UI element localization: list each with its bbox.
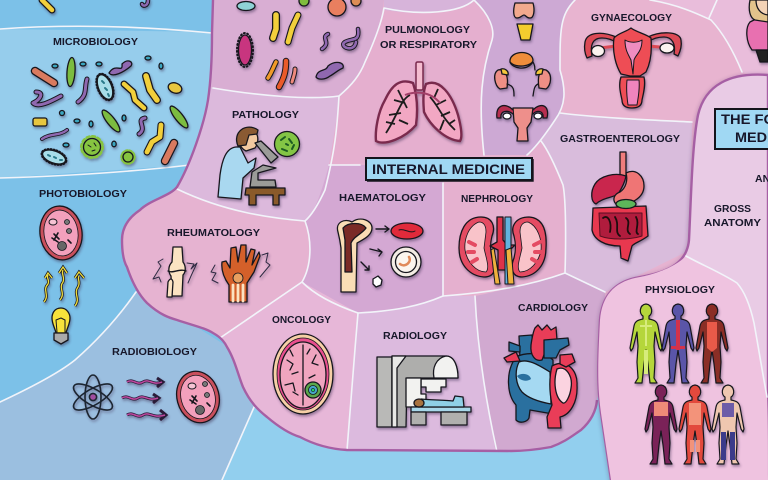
body: muscular [679,385,711,464]
microbe: purple s-curve [139,118,145,134]
region: radiology [345,296,497,460]
microbe: green rod [66,57,76,87]
label: pulmonology or respiratory: OR RESPIRATORY [380,39,477,51]
label: radiobiology: RADIOBIOLOGY [112,346,197,358]
icon: radiation arrows [122,378,166,420]
thymus yellow [517,24,533,40]
pulmonary artery [544,338,569,358]
icon: lungs [376,62,461,143]
hair [237,127,258,146]
icon: arthritic hand [211,245,270,302]
red cell [391,223,423,239]
pancreas [510,52,533,66]
label: gross anatomy [704,203,761,229]
region: cardiology [475,273,605,460]
uterus body [613,28,651,76]
region: pathology [177,86,339,221]
icon: radiotherapy machine [377,356,471,427]
icon: pathologist at microscope [218,127,300,205]
icon: heart [504,325,577,428]
icon group: microbes, upper region [237,0,361,87]
microbe: red-orange [279,61,286,87]
gall bladder and pancreas [616,200,636,208]
heading: the foundations of medicine: MEDI [735,130,768,145]
microbe: teal bacterium [93,71,117,103]
platelet [373,276,382,287]
microbe: yellow rectangle [33,118,47,126]
body: lymphatic [630,304,662,383]
label: cardiology: CARDIOLOGY [518,302,588,314]
microbe: green virus [82,136,102,158]
table [245,188,285,205]
stomach [614,171,644,204]
icon: yellow light arrows [44,267,84,306]
icon: kidneys [459,217,546,284]
patient [418,396,464,407]
microbe: pink rod [292,69,295,82]
left heart [547,363,577,428]
microbe: small virus [122,150,134,164]
label: rheumatology: RHEUMATOLOGY [167,227,260,239]
region: haematology [302,165,443,313]
microbe: green rod [168,104,190,130]
kidney right [512,217,546,277]
microbe: orange pair [268,62,276,78]
heading: internal medicine [366,158,533,181]
base block [406,378,426,407]
superior vena cava [519,335,534,360]
coat [218,147,256,199]
region: physiology [598,256,768,480]
icon: person, top right [747,0,768,62]
region: top microbes [205,0,384,98]
label: physiology: PHYSIOLOGY [645,284,715,296]
label: gross anatomy: GROSS [714,203,751,215]
right chambers [516,361,551,404]
column [377,357,392,427]
icon: haematology bone and blood cells [337,219,423,292]
bone [337,219,372,292]
body: respiratory [645,385,677,464]
icon: female reproductive system [585,28,681,108]
icon: light bulb [52,308,70,344]
white cell [391,247,421,277]
microbe: magenta bacterium [237,33,253,67]
region: gastroenterology [541,113,692,292]
microbe: purple coil [109,61,132,75]
body: digestive [696,304,728,383]
microbe: yellow chain lower [147,125,161,152]
label: pathology: PATHOLOGY [232,109,299,121]
panel: foundations of medicine [598,75,768,480]
gantry [392,356,458,427]
microscope [250,141,278,187]
region: top small [384,0,474,13]
body: skeletal [712,385,744,464]
icon: knee joint [153,247,197,297]
label: pulmonology or respiratory: PULMONOLOGY [385,24,470,36]
label: microbiology: MICROBIOLOGY [53,36,138,48]
lung: left [376,81,417,143]
microbe: yellow chain [124,84,144,108]
microbe: yellow chains right [288,15,298,42]
region: oncology [306,284,352,310]
microbe: purple thread [42,130,67,139]
label: radiology: RADIOLOGY [383,330,447,342]
icon: photobiology cell [36,203,86,263]
head [421,379,446,392]
region: pulmonology [330,122,336,164]
kidney left [495,70,508,89]
intestines [592,206,648,261]
body details [640,320,735,460]
microbe: green rod [100,108,122,134]
label: gynaecology: GYNAECOLOGY [591,12,672,24]
microbe: purple worm [33,92,61,105]
label: haematology: HAEMATOLOGY [339,192,426,204]
oesophagus [620,152,626,176]
table [411,407,471,412]
region: nephrology [443,141,566,296]
icon: brain with tumour [273,334,333,414]
microbe: yellow oval [167,81,183,95]
vagina [620,77,645,108]
microbe: teal bacterium lower [39,146,69,168]
heading: internal medicine: INTERNAL MEDICINE [372,162,525,177]
label: nephrology: NEPHROLOGY [461,193,533,205]
aorta [531,325,557,360]
microbe: purple curved rod [78,79,87,102]
lung: right [423,83,461,141]
body: circulatory [662,304,694,383]
microbe: yellow chain two [146,76,157,100]
kidney left [459,217,495,277]
label: gastroenterology: GASTROENTEROLOGY [560,133,680,145]
label: pulmonology or respiratory [380,24,477,51]
arrows [361,226,389,270]
icon: digestive system [592,152,648,261]
microbe: brown rod [35,71,54,83]
lung: trachea [416,62,423,90]
sample dish [274,132,300,156]
label: gross anatomy: ANATOMY [704,217,761,229]
heading: the foundations of medicine [715,109,768,149]
icon group: microbes, microbiology [33,0,190,168]
uterine cavity [625,40,642,74]
microbe: purple coil lower [316,62,343,79]
icon: radiobiology cell [171,366,225,428]
small uterus [513,108,533,141]
fallopian tubes [585,33,616,58]
ovaries [592,46,604,56]
head [239,130,258,151]
kidney right [538,70,551,89]
label: photobiology: PHOTOBIOLOGY [39,188,127,200]
region: gynaecology [560,0,742,122]
microbe: brown rod lower [165,143,174,161]
microbe: teal specks [52,56,163,147]
region: top right [656,0,768,74]
icon: atom [70,375,116,419]
right heart [508,354,553,422]
thyroid [514,3,534,18]
liver [592,174,626,204]
renal vessels [490,217,515,270]
icon group: physiology bodies [630,304,744,464]
region: endocrinology [474,0,575,155]
label: oncology: ONCOLOGY [272,314,331,326]
vessel stub left [509,342,520,352]
microbe: yellow chains [273,15,276,38]
microbe: purple worms [322,29,358,49]
pulmonary veins left [504,352,520,362]
icon: endocrine organs [495,3,551,141]
